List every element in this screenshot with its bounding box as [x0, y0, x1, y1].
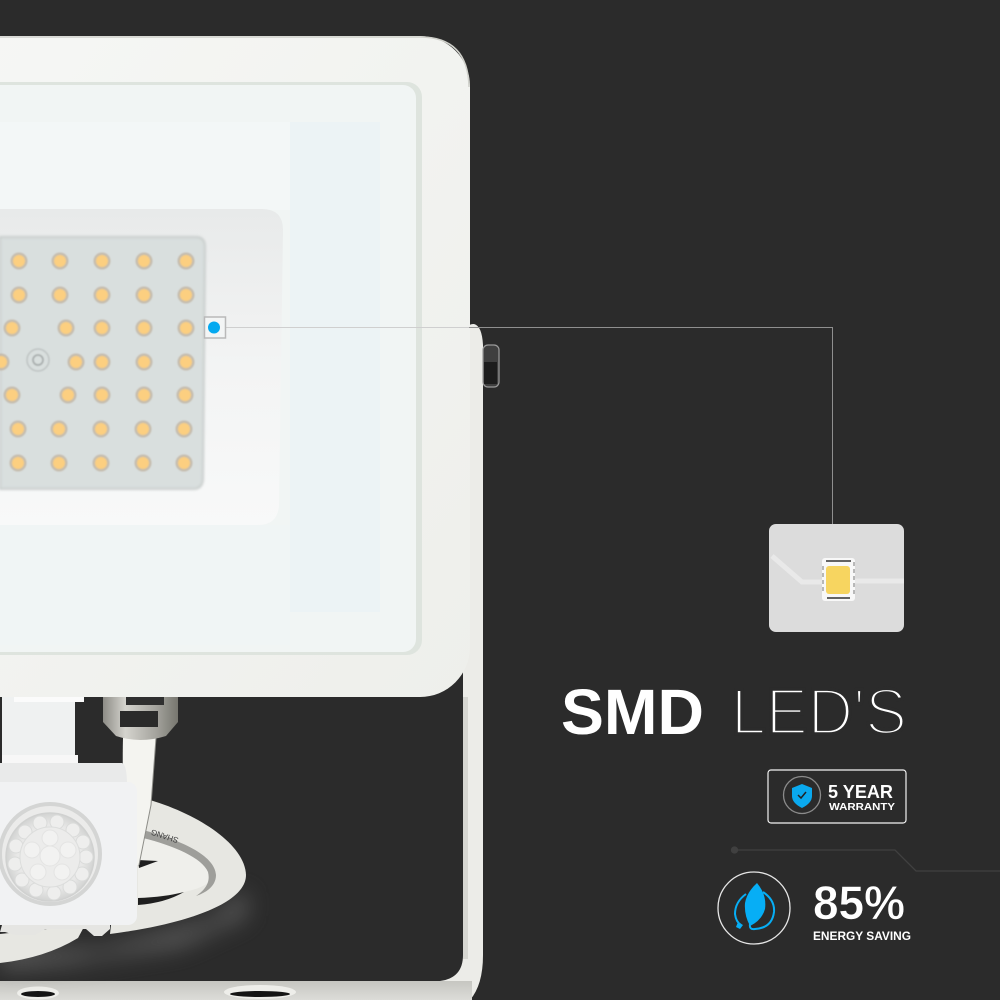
- warranty text: [828, 782, 895, 813]
- warranty text: 5 YEAR: [828, 782, 893, 802]
- decorative circuit line: [732, 847, 1000, 871]
- PIR lens: [0, 802, 102, 906]
- LED close-up card: [769, 524, 904, 632]
- LED plate: [0, 237, 205, 489]
- sensor window on plate: [27, 349, 49, 371]
- cable glow: [0, 890, 245, 968]
- bracket slot left: [17, 986, 59, 1000]
- icon: shield: [784, 776, 820, 814]
- heading: [561, 675, 907, 748]
- callout leader line: [225, 328, 832, 525]
- energy saving block: [718, 872, 911, 944]
- mounting bracket: [0, 324, 499, 1000]
- heading: LED'S: [731, 675, 907, 748]
- LED array: [0, 252, 194, 472]
- SMD chip: [822, 558, 855, 601]
- energy saving label: ENERGY SAVING: [813, 929, 911, 943]
- bracket slot right: [224, 985, 296, 999]
- heading: SMD: [561, 676, 704, 748]
- glass panel: [0, 82, 422, 655]
- percentage: 85%: [813, 876, 905, 929]
- icon: leaf and plug: [718, 872, 790, 944]
- warranty badge: [768, 770, 906, 823]
- floodlight frame: [0, 36, 470, 697]
- cable print: SHANG: [150, 827, 180, 845]
- callout marker: [204, 317, 226, 338]
- cable loop: [0, 800, 246, 963]
- bracket bolt: [483, 345, 499, 387]
- reflector: [0, 209, 283, 525]
- warranty text: WARRANTY: [829, 801, 895, 813]
- sensor stem: [2, 697, 84, 765]
- cable gland: [103, 697, 178, 865]
- frame top edge highlight: [0, 37, 469, 87]
- motion sensor: [0, 763, 137, 936]
